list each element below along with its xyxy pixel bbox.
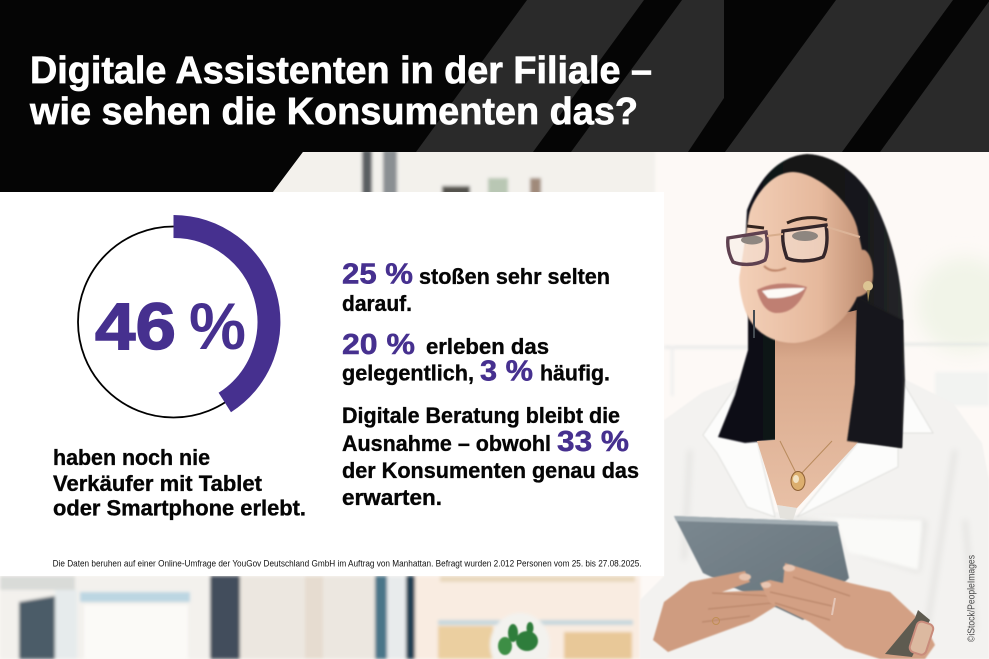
text block: 20 % and 3 %: 3 % [480, 356, 533, 388]
shirt folds [923, 506, 946, 530]
text block: 20 % and 3 %: häufig. [540, 360, 610, 386]
background window details [664, 257, 989, 406]
text block: 46 % caption: Verkäufer mit Tablet [53, 471, 263, 496]
shirt [640, 377, 989, 659]
footnote: Die Daten beruhen auf einer Online-Umfrage der YouGov Deutschland GmbH im Auftrag von Manhattan. Befragt wurden 2.012 Personen vom 25. bis 27.08.2025. [53, 558, 642, 570]
right hair tips over neck [847, 297, 903, 448]
watch [885, 610, 935, 657]
text block: 33 %: der Konsumenten genau das [342, 458, 639, 483]
nose and mouth [757, 266, 807, 313]
neck [757, 310, 860, 508]
necklace [780, 441, 832, 490]
ring [712, 598, 835, 624]
text block: 33 %: Digitale Beratung bleibt die [342, 403, 620, 428]
text block: 25 %: stoßen sehr selten [419, 264, 610, 289]
right hand [760, 563, 935, 659]
title: Digitale Assistenten in der Filiale – [30, 50, 652, 92]
face [739, 172, 873, 343]
collar [703, 377, 933, 517]
title: wie sehen die Konsumenten das? [29, 91, 638, 133]
pocket flap [833, 518, 922, 570]
text block: 33 %: 33 % [557, 426, 629, 458]
text block: 25 % [342, 258, 610, 316]
text block: 25 %: 25 % [342, 258, 413, 290]
text block: 25 %: darauf. [342, 291, 412, 316]
photo background [0, 150, 989, 659]
text block: 46 % caption: oder Smartphone erlebt. [53, 496, 306, 520]
title [29, 50, 652, 133]
text block: 20 % and 3 %: 20 % [342, 329, 415, 361]
donut chart: 46 % [78, 226, 269, 418]
glasses [728, 225, 860, 264]
tablet [674, 516, 849, 620]
eyebrows [747, 218, 827, 228]
left hand [653, 571, 776, 652]
text block: 33 %: Ausnahme – obwohl [342, 431, 551, 456]
text block: 20 % and 3 %: erleben das [426, 334, 549, 359]
text block: 20 % and 3 %: gelegentlich, [342, 360, 474, 386]
text block: 46 % caption: haben noch nie [53, 445, 210, 470]
donut chart: 46 %: 46 [95, 289, 176, 363]
text block: 33 % [342, 403, 639, 510]
icon: plant [498, 622, 538, 655]
diagonal stripes [416, 0, 989, 152]
text block: 20 % and 3 % [342, 329, 610, 388]
panel: white content card [0, 192, 664, 576]
text block: 33 %: erwarten. [342, 485, 442, 510]
text block: 46 % caption [53, 445, 306, 520]
hair [718, 154, 905, 448]
inner top [777, 505, 797, 520]
eyes [741, 231, 818, 244]
photo credit: ©iStock/PeopleImages [966, 555, 978, 642]
woman portrait [640, 154, 989, 659]
earrings [754, 281, 873, 338]
donut chart: 46 %: % [189, 289, 246, 363]
